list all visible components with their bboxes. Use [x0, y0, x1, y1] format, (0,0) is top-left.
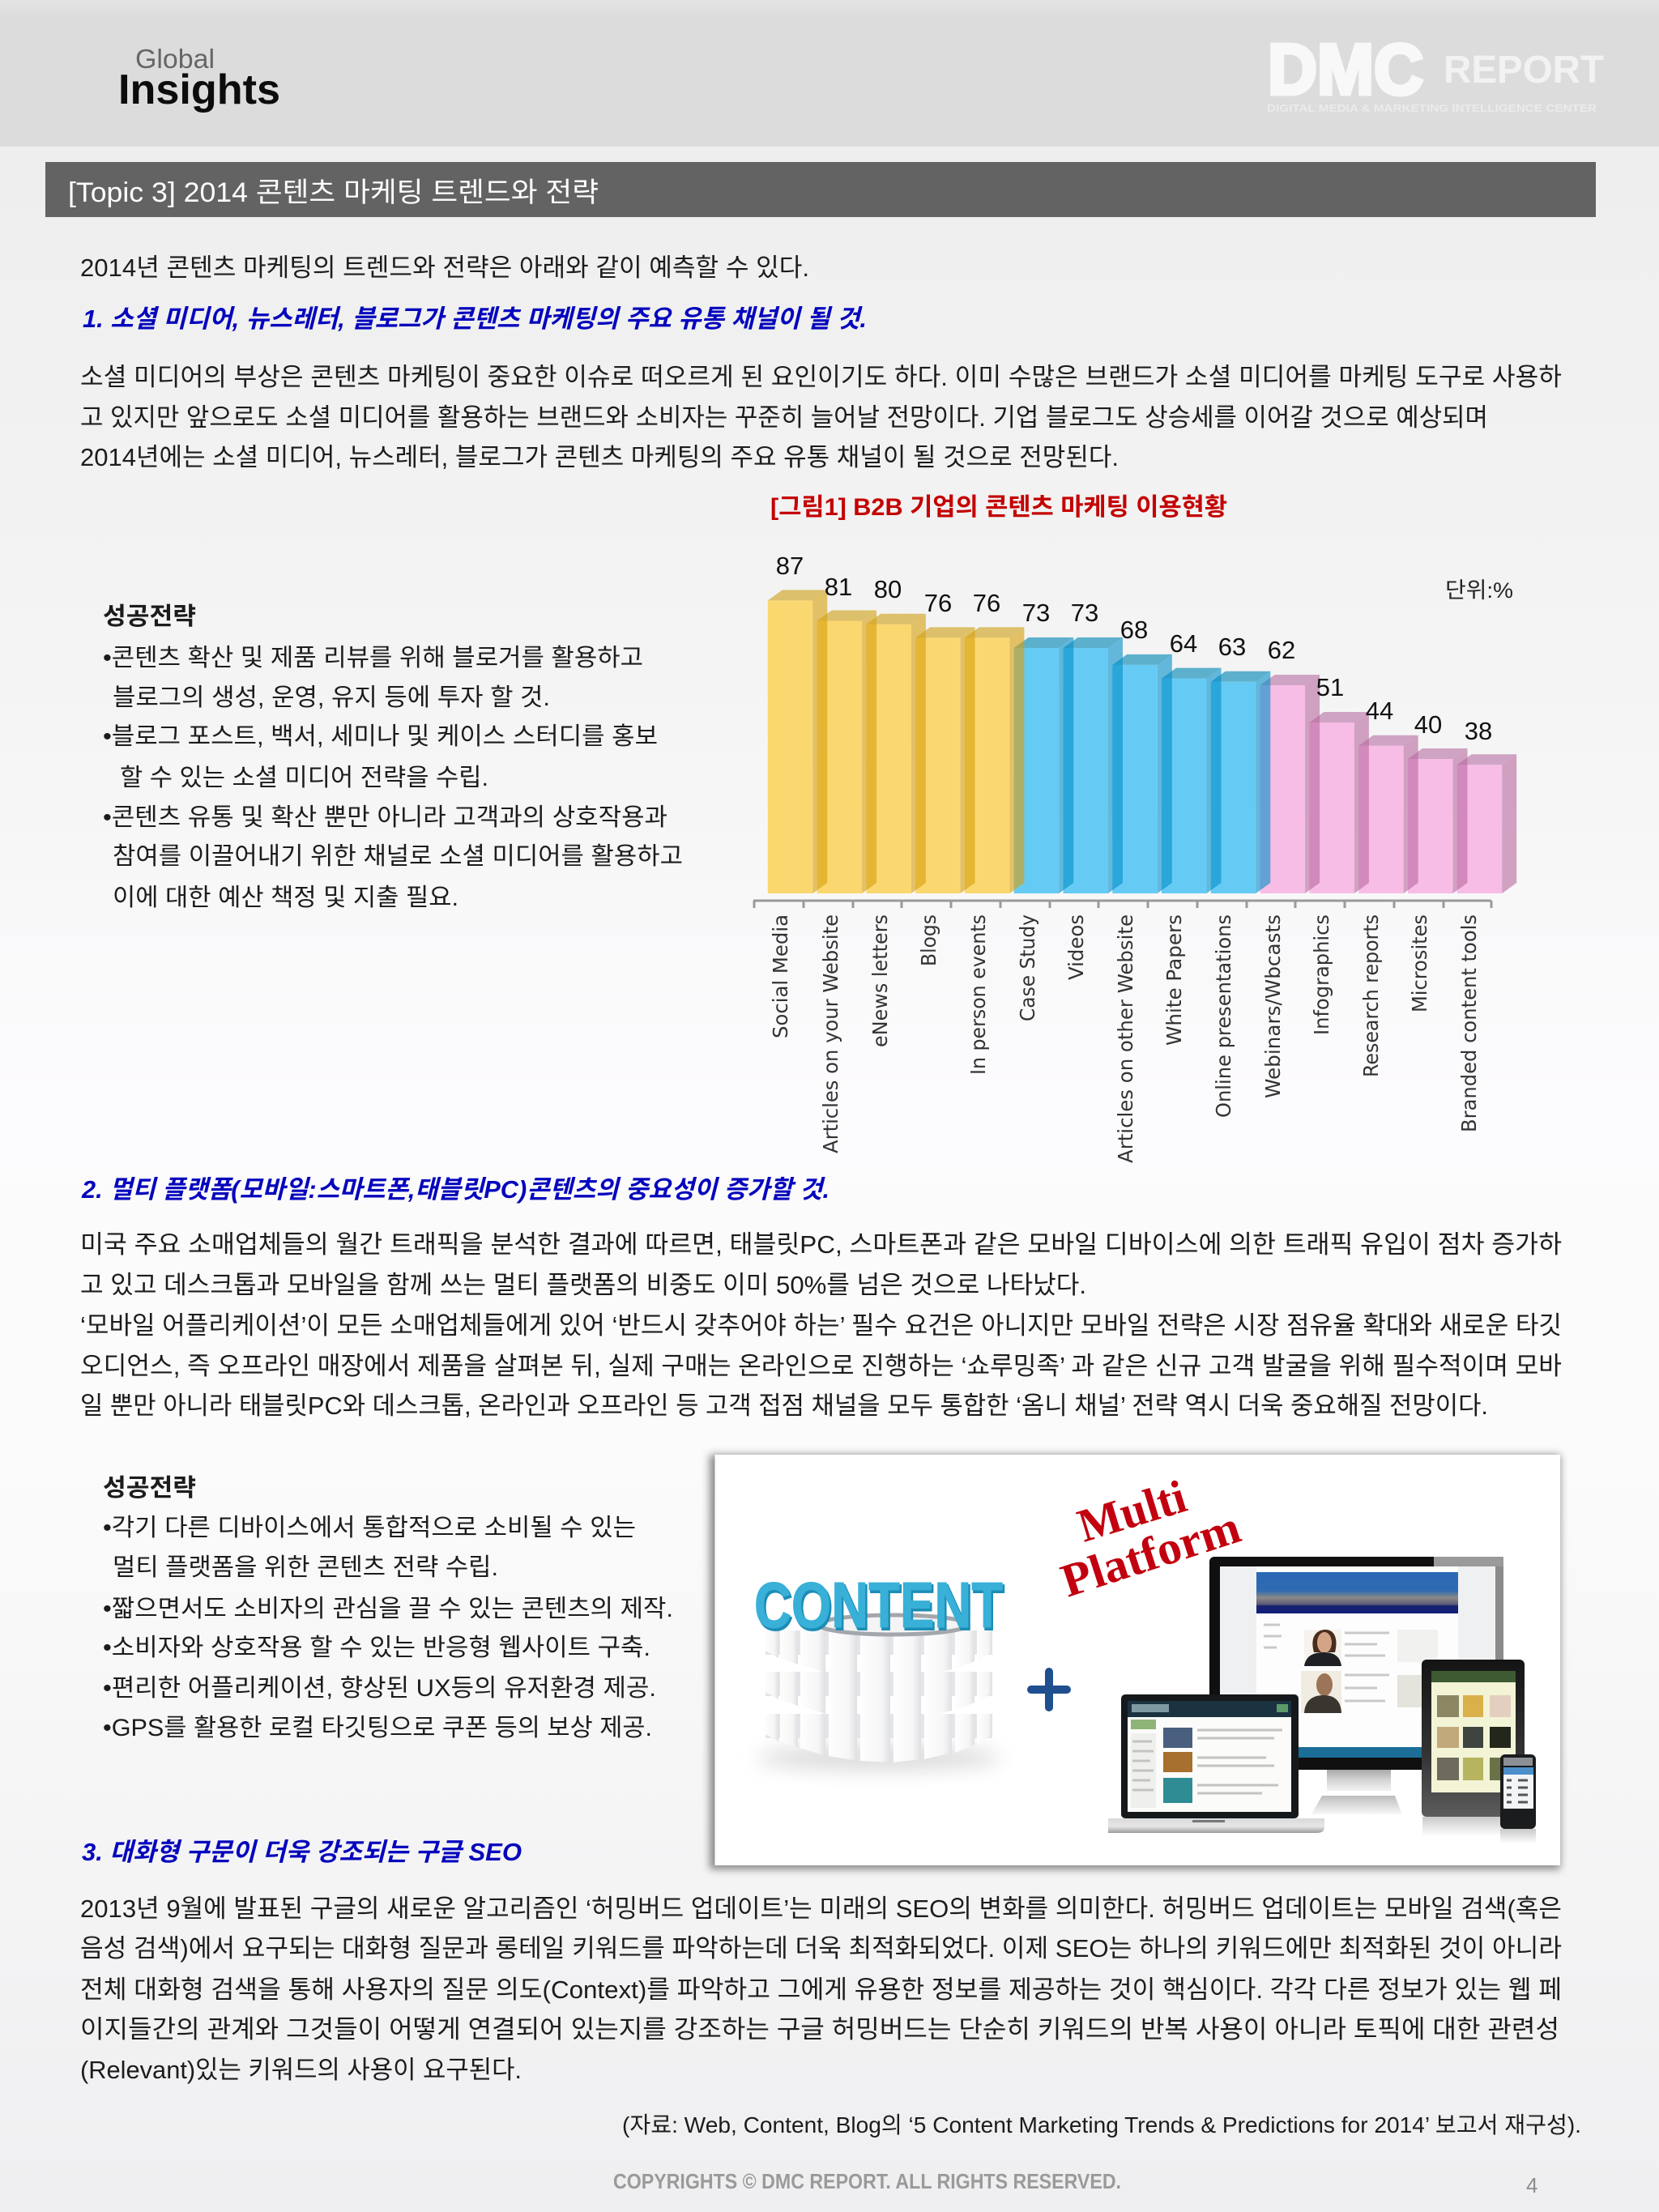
value labels: 40: [1414, 710, 1442, 739]
unit label: 단위:%: [1445, 578, 1513, 603]
strategy text block 1: [103, 603, 683, 911]
value labels: 38: [1465, 717, 1492, 745]
topic title bar: [45, 162, 1596, 217]
intro sentence: 2014년 콘텐츠 마케팅의 트렌드와 전략은 아래와 같이 예측할 수 있다.: [80, 254, 809, 282]
category labels: [769, 914, 1481, 1163]
category labels: Articles on your Website: [819, 914, 842, 1153]
section 2 body text: ‘모바일 어플리케이션’이 모든 소매업체들에게 있어 ‘반드시 갖추어야 하는’ 필수 요건은 아니지만 모바일 전략은 시장 점유율 확대와 새로운 타깃: [80, 1311, 1562, 1340]
bars: pink group: [1260, 675, 1516, 893]
portrait: man: [1301, 1671, 1341, 1713]
strategy text block 2: •GPS를 활용한 로컬 타깃팅으로 쿠폰 등의 보상 제공.: [103, 1715, 652, 1741]
page number: 4: [1526, 2173, 1537, 2197]
brand: Global Insights: [118, 44, 280, 113]
bars: blue group: [1014, 637, 1270, 893]
CONTENT wordmark: CONTENT: [754, 1569, 1003, 1641]
header band: [0, 0, 1659, 147]
value labels: 73: [1071, 599, 1098, 627]
CONTENT wordmark: CONTENT: [756, 1571, 1004, 1643]
gear stack icon: [757, 1615, 1000, 1771]
category labels: Articles on other Website: [1114, 914, 1137, 1163]
heading 3: 3. 대화형 구문이 더욱 강조되는 구글 SEO: [82, 1838, 522, 1866]
strategy text block 1: 참여를 이끌어내기 위한 채널로 소셜 미디어를 활용하고: [113, 843, 683, 870]
device: desktop monitor: [1209, 1557, 1503, 1814]
logo: DMC Report: REPORT: [1444, 49, 1604, 92]
value labels: 63: [1218, 633, 1246, 661]
logo: DMC Report: [1267, 29, 1604, 114]
section 3 body text: 전체 대화형 검색을 통해 사용자의 질문 의도(Context)를 파악하고 그에게 유용한 정보를 제공하는 것이 핵심이다. 각각 다른 정보가 있는 웹 페: [80, 1975, 1562, 2004]
source note: (자료: Web, Content, Blog의 ‘5 Content Marketing Trends & Predictions for 2014’ 보고서 재구성).: [622, 2112, 1581, 2137]
value labels: 81: [825, 573, 852, 601]
category labels: White Papers: [1162, 914, 1186, 1046]
section 1 body text: 2014년에는 소셜 미디어, 뉴스레터, 블로그가 콘텐츠 마케팅의 주요 유통 채널이 될 것으로 전망된다.: [80, 443, 1119, 471]
Multi Platform label: Multi: [1072, 1470, 1192, 1552]
category labels: Social Media: [769, 914, 792, 1038]
brand: Global Insights: Insights: [118, 66, 280, 113]
Multi Platform label: Platform: [1055, 1500, 1247, 1607]
value labels: 73: [1022, 599, 1050, 627]
category labels: Blogs: [917, 914, 940, 966]
category labels: Branded content tools: [1457, 914, 1481, 1132]
strategy text block 1: 성공전략: [103, 603, 196, 630]
strategy text block 1: 블로그의 생성, 운영, 유지 등에 투자 할 것.: [113, 684, 550, 711]
topic title bar: [Topic 3] 2014 콘텐츠 마케팅 트렌드와 전략: [68, 177, 599, 208]
figure title: [그림1] B2B 기업의 콘텐츠 마케팅 이용현황: [770, 494, 1227, 521]
value labels: 76: [924, 589, 952, 617]
section 3 body text: (Relevant)있는 키워드의 사용이 요구된다.: [80, 2056, 522, 2084]
section 2 body text: 오디언스, 즉 오프라인 매장에서 제품을 살펴본 뒤, 실제 구매는 온라인으로 진행하는 ‘쇼루밍족’ 과 같은 신규 고객 발굴을 위해 필수적이며 모바: [80, 1352, 1562, 1380]
device: laptop: [1108, 1694, 1324, 1833]
strategy text block 1: 할 수 있는 소셜 미디어 전략을 수립.: [120, 765, 488, 791]
section 3 body text: 음성 검색)에서 요구되는 대화형 질문과 롱테일 키워드를 파악하는데 더욱 최적화되었다. 이제 SEO는 하나의 키워드에만 최적화된 것이 아니라: [80, 1934, 1562, 1963]
heading 1: 1. 소셜 미디어, 뉴스레터, 블로그가 콘텐츠 마케팅의 주요 유통 채널이 될 것.: [83, 305, 867, 333]
value labels: 44: [1366, 697, 1393, 725]
strategy text block 2: 성공전략: [103, 1475, 196, 1502]
section 3 body text: [80, 1894, 1562, 2084]
category labels: Online presentations: [1212, 914, 1235, 1118]
category labels: Research reports: [1359, 914, 1383, 1077]
value labels: 80: [874, 575, 902, 603]
value labels: 62: [1268, 636, 1295, 664]
category labels: Videos: [1064, 914, 1088, 980]
value labels: 64: [1170, 629, 1197, 658]
section 3 body text: 2013년 9월에 발표된 구글의 새로운 알고리즘인 ‘허밍버드 업데이트’는 미래의 SEO의 변화를 의미한다. 허밍버드 업데이트는 모바일 검색(혹은: [80, 1894, 1562, 1923]
category labels: Case Study: [1016, 914, 1039, 1021]
strategy text block 2: 멀티 플랫폼을 위한 콘텐츠 전략 수립.: [113, 1554, 498, 1581]
strategy text block 2: [103, 1475, 673, 1741]
strategy text block 1: 이에 대한 예산 책정 및 지출 필요.: [113, 884, 458, 911]
brand: Global Insights: Global: [135, 44, 215, 74]
strategy text block 1: •블로그 포스트, 백서, 세미나 및 케이스 스터디를 홍보: [103, 723, 658, 750]
device: tablet: [1422, 1660, 1525, 1836]
value labels: 68: [1120, 616, 1148, 644]
image panel: content + multi platform: [710, 1455, 1560, 1869]
category labels: Infographics: [1310, 914, 1333, 1035]
portrait: woman: [1304, 1630, 1341, 1666]
section 3 body text: 이지들간의 관계와 그것들이 어떻게 연결되어 있는지를 강조하는 구글 허밍버드는 단순히 키워드의 반복 사용이 아니라 토픽에 대한 관련성: [80, 2015, 1559, 2044]
strategy text block 1: •콘텐츠 유통 및 확산 뿐만 아니라 고객과의 상호작용과: [103, 804, 667, 831]
section 1 body text: 소셜 미디어의 부상은 콘텐츠 마케팅이 중요한 이슈로 떠오르게 된 요인이기도 하다. 이미 수많은 브랜드가 소셜 미디어를 마케팅 도구로 사용하: [80, 363, 1562, 391]
category labels: In person events: [966, 914, 990, 1075]
value labels: 87: [776, 552, 804, 580]
strategy text block 2: •편리한 어플리케이션, 향상된 UX등의 유저환경 제공.: [103, 1675, 656, 1702]
axis line with ticks: [753, 901, 1491, 908]
bars: yellow group: [768, 590, 1024, 893]
heading 2: 2. 멀티 플랫폼(모바일:스마트폰,태블릿PC)콘텐츠의 중요성이 증가할 것.: [81, 1175, 830, 1204]
strategy text block 2: •소비자와 상호작용 할 수 있는 반응형 웹사이트 구축.: [103, 1634, 650, 1661]
value labels: 76: [973, 589, 1000, 617]
value labels: 51: [1316, 673, 1344, 701]
device: phone: [1500, 1754, 1536, 1843]
logo: DMC Report: DIGITAL MEDIA & MARKETING INTELLIGENCE CENTER: [1267, 102, 1597, 114]
strategy text block 1: •콘텐츠 확산 및 제품 리뷰를 위해 블로거를 활용하고: [103, 645, 643, 671]
plus sign: [1031, 1672, 1067, 1707]
value labels: [776, 552, 1492, 745]
strategy text block 2: •짧으면서도 소비자의 관심을 끌 수 있는 콘텐츠의 제작.: [103, 1596, 673, 1622]
section 1 body text: [80, 363, 1562, 471]
section 1 body text: 고 있지만 앞으로도 소셜 미디어를 활용하는 브랜드와 소비자는 꾸준히 늘어날 전망이다. 기업 블로그도 상승세를 이어갈 것으로 예상되며: [80, 403, 1488, 432]
strategy text block 2: •각기 다른 디바이스에서 통합적으로 소비될 수 있는: [103, 1515, 636, 1541]
category labels: eNews letters: [868, 914, 892, 1047]
category labels: Webinars/Wbcasts: [1261, 914, 1285, 1098]
section 2 body text: [80, 1230, 1562, 1420]
section 2 body text: 일 뿐만 아니라 태블릿PC와 데스크톱, 온라인과 오프라인 등 고객 접점 채널을 모두 통합한 ‘옴니 채널’ 전략 역시 더욱 중요해질 전망이다.: [80, 1392, 1488, 1420]
section 2 body text: 고 있고 데스크톱과 모바일을 함께 쓰는 멀티 플랫폼의 비중도 이미 50%를 넘은 것으로 나타났다.: [80, 1271, 1086, 1299]
category labels: Microsites: [1408, 914, 1431, 1012]
section 2 body text: 미국 주요 소매업체들의 월간 트래픽을 분석한 결과에 따르면, 태블릿PC, 스마트폰과 같은 모바일 디바이스에 의한 트래픽 유입이 점차 증가하: [80, 1230, 1562, 1259]
bar chart: B2B content marketing usage: [753, 552, 1516, 1163]
footer copyright: COPYRIGHTS © DMC REPORT. ALL RIGHTS RESERVED.: [613, 2169, 1121, 2193]
logo: DMC Report: DMC: [1268, 29, 1423, 109]
